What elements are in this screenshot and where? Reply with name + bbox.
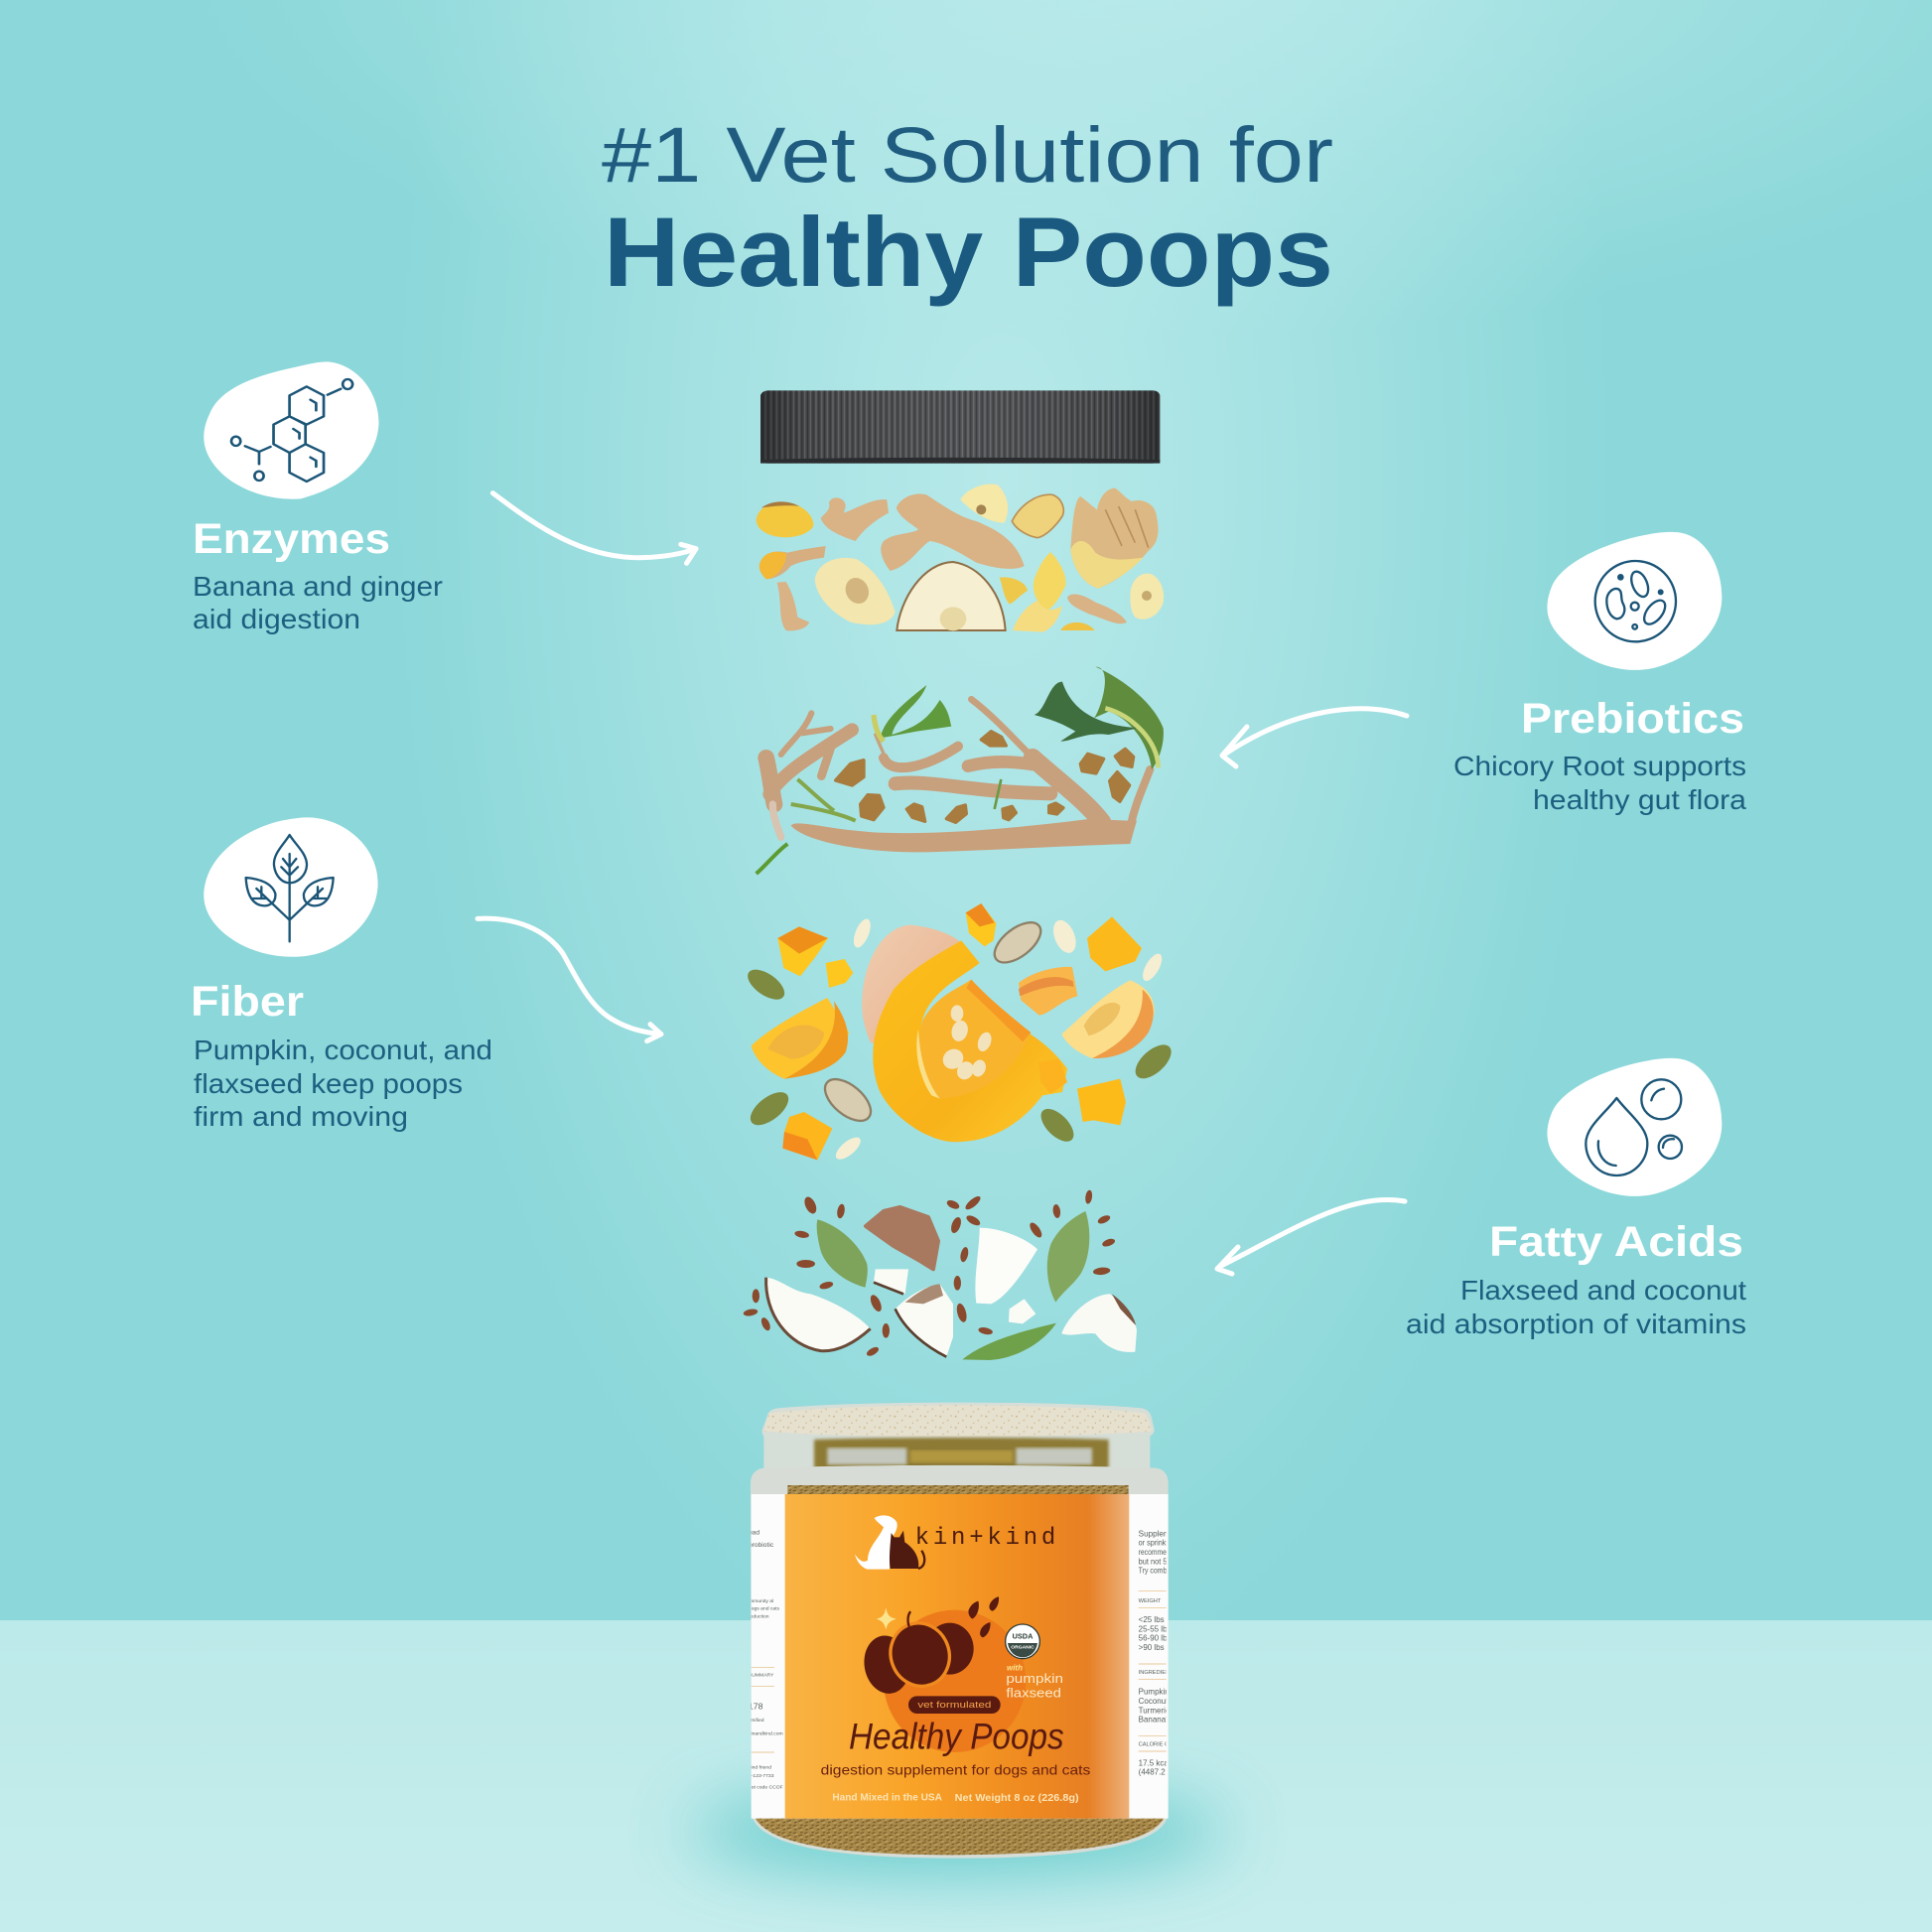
variant text: pumpkin: [1006, 1671, 1063, 1686]
right side label text: CALORIE CONTENT: [1139, 1741, 1192, 1747]
enzymes description: Banana and ginger: [193, 571, 443, 602]
left side label text: reduction: [749, 1613, 769, 1619]
brand logo: [855, 1515, 1055, 1570]
icon: bacteria blob: [1547, 532, 1722, 670]
fiber description: [194, 1035, 492, 1132]
product jar: [749, 1403, 1195, 1859]
icon: molecule blob: [204, 361, 379, 499]
right side label text: INGREDIENTS: [1139, 1670, 1177, 1676]
right side label text: or sprinkle on: [1139, 1539, 1181, 1548]
prebiotics description: Chicory Root supports: [1453, 751, 1746, 781]
arrow: fatty acids to ingredients: [1217, 1199, 1405, 1274]
ingredient layer: pumpkin: [743, 903, 1177, 1164]
floor: [0, 1620, 1932, 1932]
right side label text: Supplement: [1139, 1529, 1182, 1538]
right side label text: <25 lbs: [1139, 1615, 1165, 1624]
right side label text: (4487.2 kcal ME: [1139, 1768, 1195, 1777]
brand logo: kin+kind: [915, 1525, 1055, 1552]
net weight line: [832, 1792, 1079, 1804]
left side label text: Lot code CCOF: [749, 1785, 783, 1791]
front orange label: [785, 1494, 1129, 1819]
icon: plant blob: [204, 817, 378, 957]
fiber description: firm and moving: [194, 1101, 408, 1132]
jar body: [751, 1465, 1169, 1859]
right side label text: Pumpkin*: [1139, 1688, 1173, 1697]
right side label text: 17.5 kcal ME: [1139, 1758, 1184, 1767]
panel: fatty acids: [1406, 1058, 1746, 1339]
left side label text: 0-123-7733: [749, 1773, 774, 1779]
vet formulated pill: [908, 1696, 1001, 1714]
fatty acids description: [1406, 1275, 1746, 1339]
left side label text: kinandkind.com: [749, 1730, 783, 1736]
USDA organic seal: ORGANIC: [1011, 1645, 1035, 1651]
USDA organic seal: USDA: [1013, 1632, 1034, 1641]
fatty acids description: aid absorption of vitamins: [1406, 1309, 1746, 1339]
fatty acids heading: Fatty Acids: [1489, 1218, 1743, 1266]
arrow: fiber to ingredients: [478, 918, 661, 1041]
enzymes description: aid digestion: [193, 604, 360, 634]
variant text: [1006, 1664, 1063, 1700]
fiber heading: Fiber: [191, 978, 304, 1026]
right side label text: WEIGHT: [1139, 1598, 1162, 1604]
left side label text: 178: [749, 1702, 763, 1712]
title line 1: #1 Vet Solution for: [602, 110, 1333, 199]
ingredient layer: ginger and banana: [757, 483, 1164, 632]
fatty acids description: Flaxseed and coconut: [1460, 1275, 1746, 1306]
left side label text: immunity al: [749, 1598, 773, 1604]
right side label text: 25-55 lbs: [1139, 1624, 1172, 1633]
panel: fiber: [191, 817, 492, 1132]
prebiotics heading: Prebiotics: [1521, 695, 1744, 743]
right side label text: Banana*: [1139, 1716, 1169, 1725]
icon: oil drop blob: [1547, 1058, 1722, 1196]
left side label text: dogs and cats: [749, 1606, 780, 1612]
enzymes description: [193, 571, 443, 634]
right side label text: Turmeric*: [1139, 1706, 1173, 1715]
sparkle: [877, 1607, 897, 1630]
left side label text: probiotic: [749, 1542, 774, 1549]
panel: enzymes: [193, 361, 443, 634]
panel: prebiotics: [1453, 532, 1746, 815]
left side label text: Unified: [749, 1718, 764, 1724]
net weight line: Hand Mixed in the USA: [832, 1792, 942, 1803]
variant text: with: [1007, 1664, 1023, 1673]
vet formulated pill: vet formulated: [917, 1700, 991, 1710]
right side label text: >90 lbs: [1139, 1643, 1165, 1652]
pumpkin logo: [860, 1596, 999, 1697]
right side label text: recommended: [1139, 1548, 1181, 1557]
right side label text: [1138, 1531, 1167, 1776]
net weight line: Net Weight 8 oz (226.8g): [955, 1793, 1079, 1804]
USDA organic seal: [1006, 1624, 1039, 1659]
prebiotics description: healthy gut flora: [1533, 784, 1746, 815]
arrow: enzymes to ingredients: [492, 493, 696, 563]
jar neck: [762, 1403, 1155, 1474]
prebiotics description: [1453, 751, 1746, 815]
jar lid: [760, 390, 1160, 464]
right side label text: Coconut*: [1139, 1697, 1172, 1706]
left side label text: SUMMARY: [749, 1672, 774, 1678]
right side label text: but not 50mg: [1139, 1557, 1181, 1566]
right side label text: Try combining: [1139, 1567, 1181, 1576]
left side label text: [749, 1529, 783, 1791]
enzymes heading: Enzymes: [193, 515, 390, 563]
ingredient layer: chicory root: [757, 667, 1164, 874]
variant text: flaxseed: [1006, 1685, 1061, 1700]
title line 2: Healthy Poops: [604, 197, 1333, 307]
product subtitle: digestion supplement for dogs and cats: [821, 1761, 1090, 1777]
left side label text: kind friend: [749, 1765, 771, 1771]
jar shadow on floor: [690, 1790, 1226, 1873]
product name: Healthy Poops: [849, 1716, 1064, 1757]
title: [602, 110, 1333, 307]
right side label text: 56-90 lbs: [1139, 1634, 1172, 1643]
fiber description: flaxseed keep poops: [194, 1068, 463, 1099]
orange circle: [884, 1610, 1026, 1752]
left side label text: bad: [749, 1529, 759, 1536]
arrow: prebiotics to ingredients: [1222, 709, 1407, 766]
fiber description: Pumpkin, coconut, and: [194, 1035, 492, 1065]
ingredient layer: coconut, flaxseed and mint: [743, 1189, 1137, 1360]
